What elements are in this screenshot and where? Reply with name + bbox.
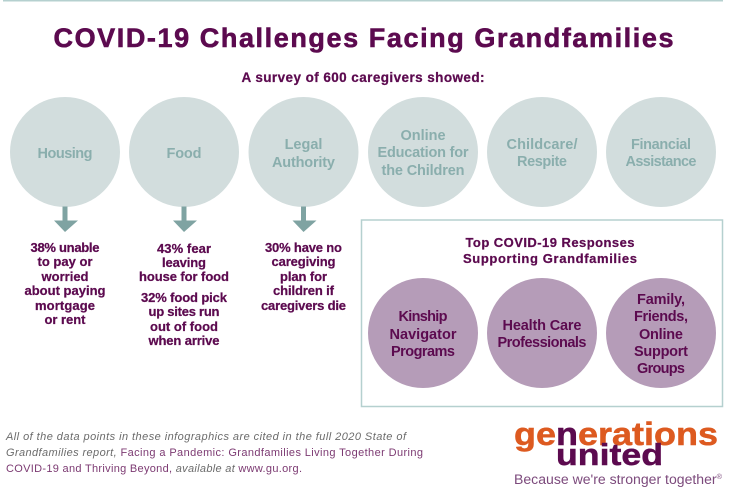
text: legal stats: plan for [280,269,327,284]
circle: health care [487,278,597,388]
text: housing stats: or rent [44,312,86,327]
text: food stats: when arrive [148,333,220,348]
circle: housing: Housing [38,146,92,162]
circle: family friends: Support [634,344,688,360]
circle: family friends [606,278,716,388]
logo tagline: ® [717,473,723,481]
circle: food [129,97,239,207]
panel heading [463,235,637,266]
text: food stats: leaving [162,255,206,270]
text: food stats: house for food [139,269,229,284]
circle: online education: Online [400,128,446,144]
subtitle: A survey of 600 caregivers showed: [242,70,484,85]
logo: generations united [514,416,723,487]
text: food stats: up sites run [148,304,220,319]
text: food stats: out of food [150,319,218,334]
footnote: All of the data points in these infographics are cited in the full 2020 State of [5,431,407,443]
circle: childcare: Childcare/ [506,137,578,153]
logo tagline: Because we're stronger together [514,472,709,487]
panel heading: Top COVID-19 Responses [466,235,634,250]
circle: family friends: Groups [637,361,685,377]
circle: online education: Education for [378,145,469,161]
circle: housing [10,97,120,207]
text: legal stats: 30% have no [265,240,342,255]
text: housing stats [24,240,106,327]
circle: financial assistance [606,97,716,207]
circle: family friends: Online [639,327,683,343]
text: food stats [139,241,229,348]
circle: childcare [487,97,597,207]
panel: top responses [362,220,722,406]
footnote: Grandfamilies report, Facing a Pandemic: Grandfamilies Living Together During [6,447,423,459]
circle: financial assistance: Financial [631,137,691,153]
circle: health care: Professionals [498,335,586,351]
circle: kinship navigator: Navigator [390,327,457,343]
text: legal stats [261,240,346,313]
arrow: legal authority [292,206,316,232]
arrow: food [173,206,197,232]
logo: generations united: generations [514,416,718,452]
circle: family friends: Family, [637,292,685,308]
panel heading: Supporting Grandfamilies [463,251,637,266]
text: legal stats: children if [273,283,335,298]
circle: food: Food [166,146,202,162]
footnote: COVID-19 and Thriving Beyond, available at www.gu.org. [6,463,302,475]
text: housing stats: about paying [24,283,106,298]
arrow: housing [54,206,78,232]
title: COVID-19 Challenges Facing Grandfamilies [54,23,674,53]
circle: legal authority: Authority [272,155,335,171]
circle: online education [368,97,478,207]
text: food stats: 43% fear [157,241,211,256]
circle: kinship navigator: Programs [391,344,455,360]
circle: legal authority: Legal [285,137,322,153]
circle: health care: Health Care [502,318,582,334]
text: housing stats: 38% unable [30,240,100,255]
text: food stats: 32% food pick [141,290,228,305]
footnote [5,431,423,475]
circle: childcare: Respite [517,154,567,170]
logo: generations united: united [556,437,663,472]
circle: kinship navigator: Kinship [398,309,448,325]
circle: financial assistance: Assistance [626,154,696,170]
circle: family friends: Friends, [634,309,688,325]
circle: kinship navigator [368,278,478,388]
text: legal stats: caregivers die [261,298,346,313]
circle: legal authority [248,97,358,207]
text: housing stats: mortgage [35,298,95,313]
text: housing stats: worried [40,269,89,284]
text: housing stats: to pay or [38,254,92,269]
circle: online education: the Children [382,163,464,179]
text: legal stats: caregiving [272,254,336,269]
